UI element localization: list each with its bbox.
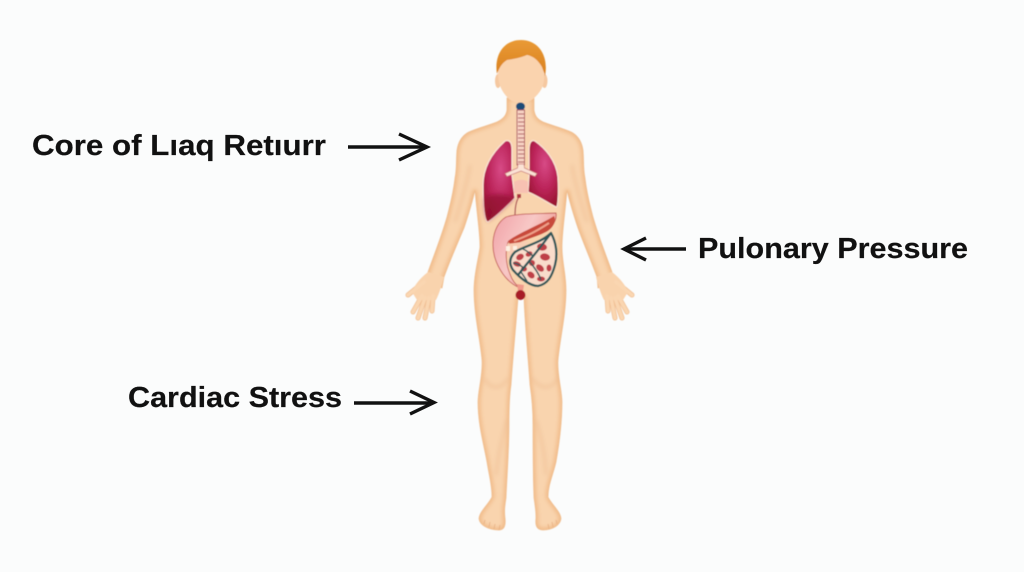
- human figure: [408, 40, 632, 530]
- red organ below: [516, 290, 526, 300]
- label: Core of Liaq Return: Core of Lıaq Retıurr: [32, 130, 326, 162]
- arrow to arm: [624, 238, 686, 260]
- left lung: [483, 140, 515, 222]
- body silhouette: [424, 98, 616, 530]
- left hand: [408, 272, 444, 318]
- ears: [495, 74, 548, 88]
- stomach: [493, 213, 556, 288]
- left lung lower shade: [485, 194, 514, 221]
- toes: [484, 520, 557, 530]
- label: Pulonary Pressure: Pulonary Pressure: [698, 233, 968, 265]
- right lung: [528, 140, 558, 207]
- right hand: [596, 272, 632, 318]
- face: [498, 55, 544, 103]
- larynx: [516, 102, 525, 110]
- label: Cardiac Stress: Cardiac Stress: [128, 382, 342, 414]
- esophagus: [515, 197, 519, 216]
- infographic canvas: [33, 39, 968, 531]
- diaphragm tissue: [514, 180, 528, 193]
- arrow to legs: [354, 391, 434, 414]
- small connector: [517, 284, 524, 291]
- liver band: [508, 216, 555, 247]
- intestine organ: [510, 233, 556, 286]
- arrow to chest: [348, 134, 427, 160]
- bronchi: [505, 164, 537, 176]
- small intestine strip: [507, 241, 530, 262]
- hair: [496, 40, 546, 76]
- trachea: [517, 110, 524, 165]
